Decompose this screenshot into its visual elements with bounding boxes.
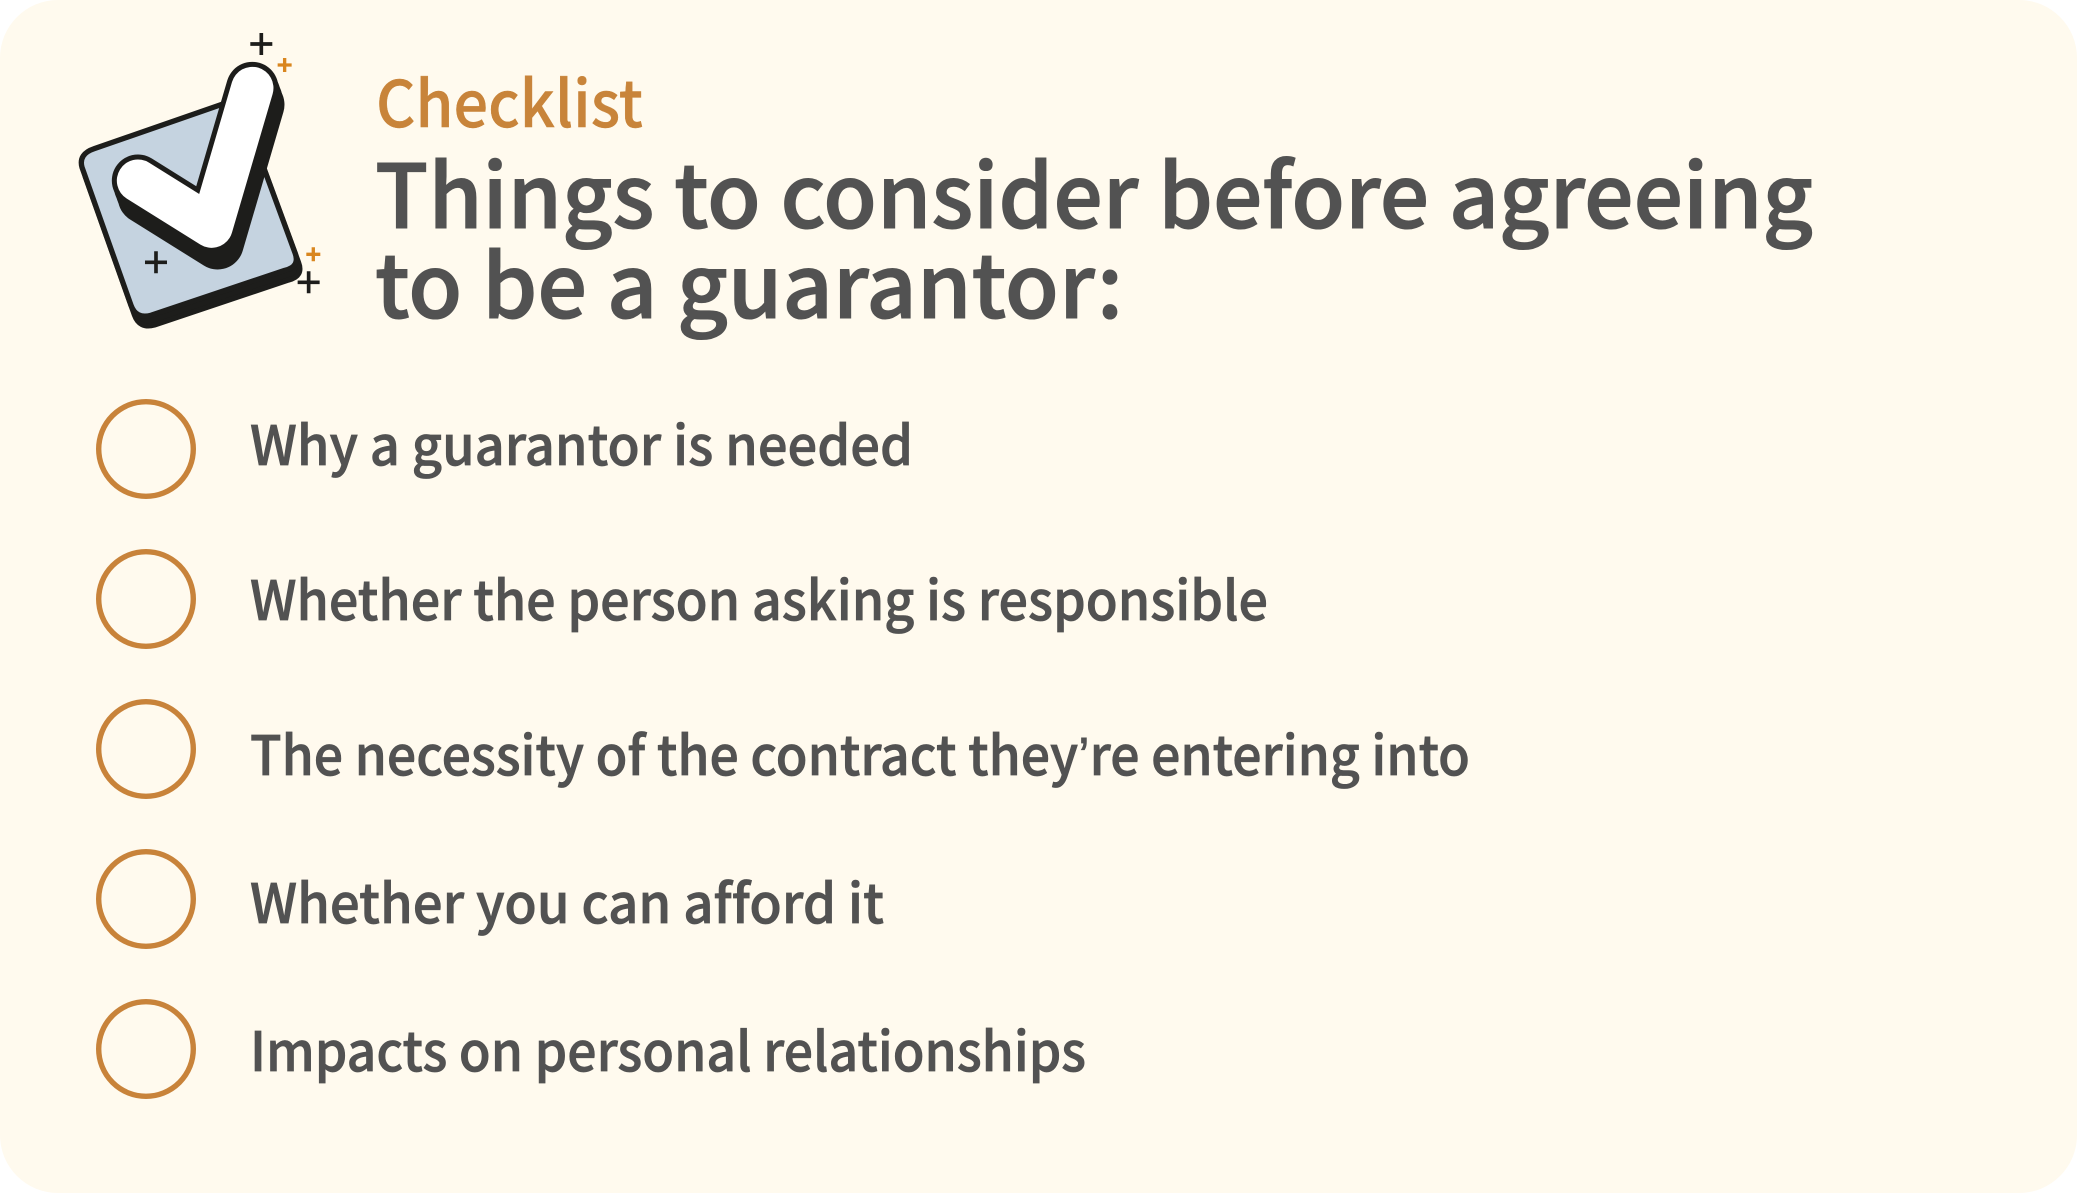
checkbox shadow bbox=[85, 108, 300, 326]
sparkles bbox=[145, 33, 320, 293]
tick face bbox=[138, 88, 252, 227]
checkbox face bbox=[81, 99, 296, 316]
tick shadow bbox=[138, 88, 258, 243]
checklist item 5: Impacts on personal relationships bbox=[250, 1008, 1086, 1087]
checklist item 1 bbox=[99, 402, 913, 496]
checklist item 4 bbox=[99, 852, 884, 946]
eyebrow: Checklist: Checklist bbox=[376, 54, 643, 146]
heading: to be a guarantor: bbox=[375, 217, 1123, 344]
checklist item 4: Whether you can afford it bbox=[250, 860, 884, 939]
checklist item 3: The necessity of the contract they’re entering into bbox=[250, 712, 1470, 791]
heading: Things to consider before agreeing bbox=[375, 127, 1813, 254]
heading bbox=[375, 127, 1813, 344]
checklist item 2: Whether the person asking is responsible bbox=[250, 557, 1268, 636]
checklist item 1: Why a guarantor is needed bbox=[250, 402, 913, 481]
checklist item 5 bbox=[99, 1002, 1086, 1096]
icon: tilted checkbox with tick bbox=[81, 33, 320, 326]
